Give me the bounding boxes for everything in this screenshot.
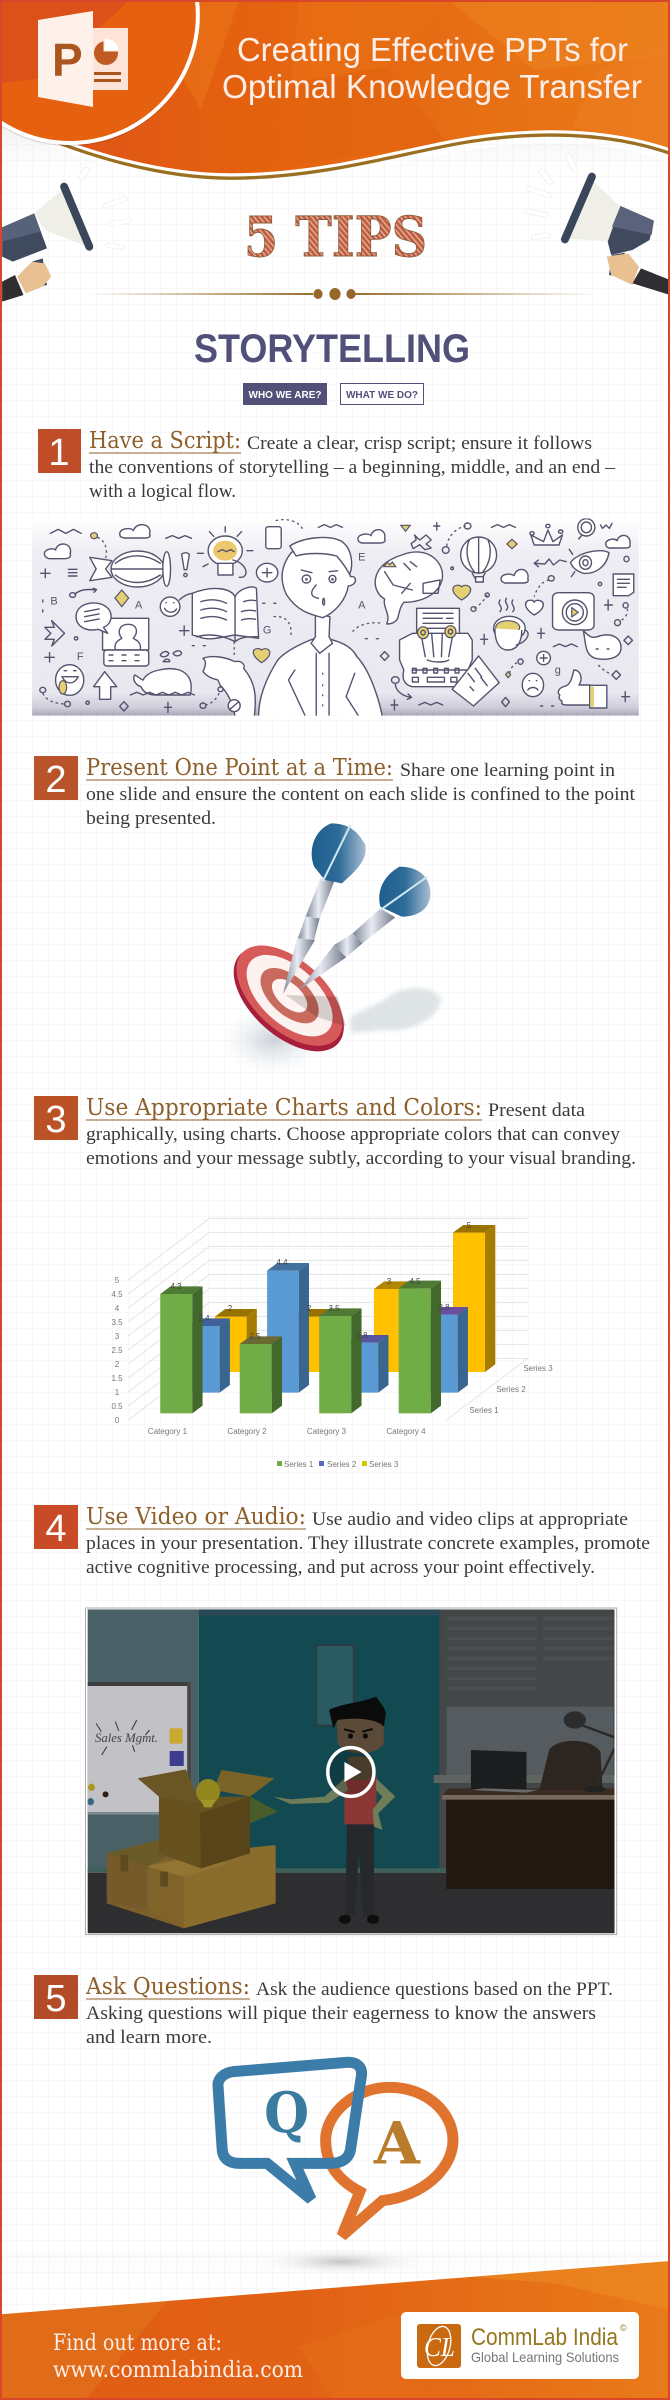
tip 4 body text (86, 1510, 650, 1578)
number badge 4: 4 (45, 1508, 67, 1550)
tip 1 body text: the conventions of storytelling – a beginning, middle, and an end – (89, 458, 616, 478)
doodle illustration: storytelling: F (77, 651, 84, 663)
value axis: 2.5 (111, 1346, 123, 1355)
series 3 bars (215, 1225, 495, 1372)
chart legend: Series 3 (369, 1460, 399, 1469)
number badge 2: 2 (45, 759, 67, 801)
tip 4 (34, 1504, 650, 1578)
series axis (469, 1364, 553, 1415)
chart legend (277, 1460, 399, 1469)
illustration: darts in target (211, 823, 441, 1075)
value axis: 1.5 (111, 1374, 123, 1383)
tip 2 body text: being presented. (86, 809, 216, 829)
whiteboard caption: Sales Mgmt. (95, 1730, 158, 1745)
icon: left megaphone with hand (2, 166, 132, 302)
value axis: 5 (115, 1276, 120, 1285)
number badge 2 (34, 756, 78, 801)
tip 5 heading: Ask Questions: (85, 1974, 250, 2000)
category axis: Category 2 (227, 1427, 267, 1436)
icon: PowerPoint logo (38, 11, 128, 107)
category axis: Category 1 (148, 1427, 188, 1436)
header banner (0, 0, 670, 187)
value labels: 2.8 (438, 1303, 450, 1312)
category axis: Category 4 (386, 1427, 426, 1436)
tip 1 body text: with a logical flow. (89, 482, 236, 502)
tip 2 (34, 755, 636, 829)
doodle illustration: storytelling: A (358, 600, 366, 612)
tip 4 body text: active cognitive processing, and put across your point effectively. (86, 1558, 595, 1578)
tip 1 heading: Have a Script: (89, 428, 241, 454)
whiteboard (87, 1682, 191, 1815)
series axis: Series 3 (523, 1364, 553, 1373)
category axis: Category 3 (307, 1427, 347, 1436)
video thumbnail (85, 1608, 617, 1935)
number badge 3 (34, 1096, 78, 1141)
banner title: Creating Effective PPTs for (237, 31, 628, 68)
value labels: 4.4 (276, 1258, 288, 1267)
value labels: 5 (467, 1221, 472, 1230)
footer band (0, 2250, 670, 2400)
tip 3 body text: Present data (488, 1101, 585, 1121)
number badge 4 (34, 1505, 78, 1550)
tip 2 body text: Share one learning point in (400, 761, 615, 781)
picture frame (316, 1645, 354, 1726)
value axis: 1 (115, 1388, 120, 1397)
value axis: 3 (115, 1332, 120, 1341)
tip 5 body text: Asking questions will pique their eagerness to know the answers (86, 2004, 596, 2024)
icon: right megaphone with hand (524, 153, 670, 295)
tip 2 heading: Present One Point at a Time: (86, 755, 393, 781)
series axis: Series 1 (469, 1406, 499, 1415)
answer bubble: A (373, 2109, 421, 2177)
cardboard boxes with lightbulb (107, 1769, 278, 1928)
dart 1 (283, 823, 366, 994)
desk, laptop, chair and lamp (442, 1711, 615, 1889)
doodle illustration: storytelling: g (555, 664, 561, 676)
answer bubble (326, 2087, 453, 2236)
footer call to action (53, 2331, 303, 2383)
button: what we do (340, 384, 424, 404)
play button (328, 1748, 374, 1796)
tip 1 body text (89, 434, 616, 502)
tip 1 body text: Create a clear, crisp script; ensure it follows (247, 434, 592, 454)
tip 2 body text: one slide and ensure the content on each slide is confined to the point (86, 785, 636, 805)
value axis (111, 1276, 123, 1425)
tip 5 body text: Ask the audience questions based on the PPT. (256, 1980, 613, 2000)
dart 2 (299, 867, 430, 990)
tip 2 body text (86, 761, 636, 829)
tip 5 body text: and learn more. (86, 2028, 212, 2048)
question bubble (218, 2062, 362, 2199)
value labels: 2 (228, 1304, 233, 1313)
tip 3 body text: emotions and your message subtly, according to your visual branding. (86, 1149, 636, 1169)
banner title: Optimal Knowledge Transfer (222, 68, 642, 105)
banner title (222, 31, 642, 105)
CommLab India logo: © (620, 2323, 627, 2333)
icon: PowerPoint logo: P (52, 34, 83, 86)
chart legend: Series 1 (284, 1460, 314, 1469)
value labels: 2 (307, 1304, 312, 1313)
tip 5 body text (86, 1980, 613, 2048)
value labels (170, 1221, 472, 1341)
icon: Q and A speech bubbles (218, 2062, 453, 2276)
tip 3 body text: graphically, using charts. Choose appropriate colors that can convey (86, 1125, 621, 1145)
CommLab India logo: CL (424, 2332, 455, 2362)
value labels: 2.4 (198, 1314, 210, 1323)
value axis: 0.5 (111, 1402, 123, 1411)
value labels: 3.5 (328, 1304, 340, 1313)
value axis: 2 (115, 1360, 120, 1369)
tip 5 (34, 1974, 613, 2048)
divider (85, 288, 598, 300)
tip 1 (38, 428, 616, 502)
footer call to action: Find out more at: (53, 2331, 222, 2356)
doodle illustration: storytelling: A (135, 599, 143, 611)
title: 5 TIPS: 5 TIPS (244, 204, 427, 269)
category axis (148, 1427, 426, 1436)
doodle illustration: storytelling (32, 518, 639, 717)
button: what we do: WHAT WE DO? (346, 390, 418, 401)
footer call to action: www.commlabindia.com (53, 2358, 303, 2383)
chart legend: Series 2 (327, 1460, 357, 1469)
target board (211, 931, 367, 1066)
value labels: 4.5 (409, 1277, 421, 1286)
doodle illustration: storytelling: E (358, 552, 365, 564)
value axis: 0 (115, 1416, 120, 1425)
value labels: 3 (387, 1277, 392, 1286)
button: who we are (243, 383, 327, 405)
series 2 bars (188, 1263, 468, 1393)
number badge 5: 5 (45, 1978, 67, 2020)
CommLab India logo (401, 2312, 639, 2379)
value axis: 3.5 (111, 1318, 123, 1327)
value labels: 1.8 (356, 1331, 368, 1340)
number badge 1: 1 (48, 432, 70, 474)
tip 3 heading: Use Appropriate Charts and Colors: (86, 1095, 482, 1121)
CommLab India logo: CommLab India (471, 2324, 619, 2351)
value axis: 4 (115, 1304, 120, 1313)
CommLab India logo: Global Learning Solutions (471, 2349, 619, 2365)
button: who we are: WHO WE ARE? (249, 390, 321, 401)
doodle illustration: storytelling: B (50, 595, 58, 607)
number badge 5 (34, 1975, 78, 2020)
tip 4 body text: Use audio and video clips at appropriate (312, 1510, 628, 1530)
heading: storytelling: STORYTELLING (194, 327, 470, 371)
tip 3 body text (86, 1101, 636, 1169)
value labels: 2.5 (249, 1332, 261, 1341)
series 1 bars (160, 1281, 441, 1413)
3D bar chart (111, 1218, 553, 1469)
value axis: 4.5 (111, 1290, 123, 1299)
value labels: 4.3 (170, 1282, 182, 1291)
number badge 1 (38, 429, 81, 474)
number badge 3: 3 (45, 1099, 67, 1141)
question bubble: Q (264, 2081, 309, 2147)
cartoon presenter (274, 1697, 395, 1924)
tip 3 (34, 1095, 636, 1169)
series axis: Series 2 (496, 1385, 526, 1394)
tip 4 body text: places in your presentation. They illustrate concrete examples, promote (86, 1534, 650, 1554)
doodle illustration: storytelling: G (263, 624, 271, 636)
tip 4 heading: Use Video or Audio: (86, 1504, 306, 1530)
